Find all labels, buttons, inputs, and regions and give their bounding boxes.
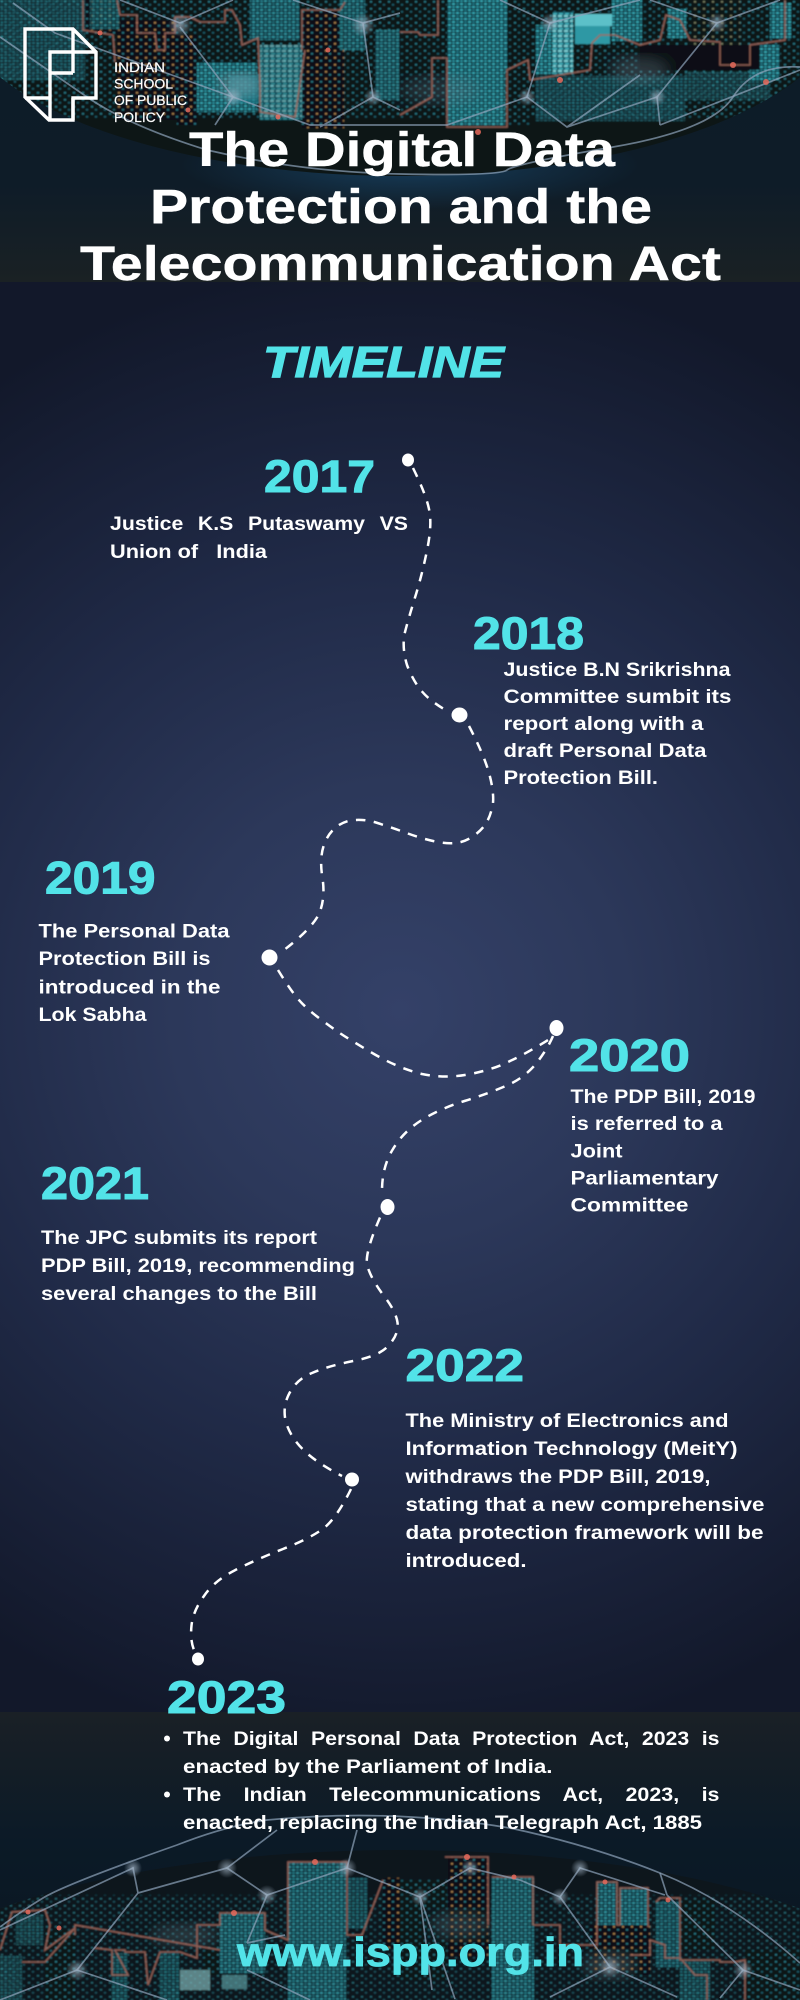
event: 2020: is referred to a: [570, 1113, 723, 1135]
logo wordmark: OF PUBLIC: [114, 92, 187, 108]
title: The Digital Data: [189, 124, 615, 177]
logo wordmark: SCHOOL: [114, 76, 173, 92]
event: 2019: [38, 852, 230, 1026]
event: 2021: several changes to the Bill: [41, 1283, 317, 1305]
event: 2023: [164, 1672, 720, 1834]
logo wordmark: POLICY: [114, 109, 166, 125]
event: 2022: withdraws the PDP Bill, 2019,: [404, 1466, 710, 1488]
network lines top: [0, 0, 800, 174]
red flares top: [98, 30, 769, 135]
event: 2019: introduced in the: [38, 976, 221, 998]
event: 2017: [110, 451, 408, 563]
event: 2023: 2023: [167, 1672, 286, 1723]
network lines bottom: [0, 1816, 800, 2000]
event: 2019: 2019: [45, 852, 156, 904]
title: Protection and the: [150, 181, 652, 234]
title: Telecommunication Act: [80, 238, 721, 291]
city buildings top: [0, 0, 800, 185]
event: 2021: [41, 1158, 355, 1305]
event: 2017: 2017: [264, 451, 375, 502]
bullet list: [164, 1728, 720, 1834]
event: 2022: introduced.: [406, 1550, 526, 1572]
event: 2022: stating that a new comprehensive: [406, 1494, 765, 1516]
red flares bottom: [26, 1854, 670, 1930]
city buildings bottom: [0, 1845, 800, 2000]
heading: timeline: TIMELINE: [263, 338, 506, 387]
logo wordmark: INDIAN: [114, 59, 165, 75]
bullet list: The Indian Telecommunications Act, 2023, is: [183, 1784, 720, 1806]
event: 2021: PDP Bill, 2019, recommending: [41, 1255, 355, 1277]
event: 2022: Information Technology (MeitY): [406, 1438, 738, 1460]
event: 2018: draft Personal Data: [504, 740, 707, 762]
event: 2021: The JPC submits its report: [41, 1227, 318, 1249]
event: 2020: Parliamentary: [570, 1168, 719, 1190]
bullet list: enacted, replacing the Indian Telegraph Act, 1885: [183, 1812, 702, 1834]
event: 2022: data protection framework will be: [406, 1522, 764, 1544]
panel: header city image: [0, 0, 800, 282]
event: 2019: Protection Bill is: [38, 948, 211, 970]
timeline dashed path: [191, 468, 553, 1650]
event: 2021: 2021: [41, 1158, 149, 1209]
event: 2018: [473, 608, 732, 789]
event: 2022: 2022: [406, 1340, 524, 1391]
bullet list: The Digital Personal Data Protection Act, 2023 is: [183, 1728, 720, 1750]
event: 2017: Union of India: [110, 541, 267, 563]
event: 2020: The PDP Bill, 2019: [570, 1086, 756, 1108]
panel: footer city image: [0, 1712, 800, 2000]
skyline outline top: [83, 0, 785, 127]
title: [80, 124, 721, 291]
timeline dots: [192, 454, 564, 1666]
event: 2019: Lok Sabha: [38, 1004, 147, 1026]
event: 2018: 2018: [473, 608, 584, 659]
logo wordmark: [114, 59, 187, 125]
event: 2022: [404, 1340, 765, 1572]
event: 2020: 2020: [569, 1030, 690, 1081]
event: 2018: report along with a: [504, 713, 704, 735]
icon: logo mark: [25, 29, 96, 120]
event: 2020: Joint: [570, 1140, 623, 1162]
skyline outline bottom: [0, 1857, 745, 2000]
logo: Indian School of Public Policy: [25, 29, 187, 125]
bullet list: enacted by the Parliament of India.: [183, 1756, 552, 1778]
website url: www.ispp.org.in: [236, 1929, 584, 1975]
event: 2020: Committee: [570, 1194, 689, 1216]
event: 2019: The Personal Data: [38, 920, 230, 942]
event: 2018: Committee sumbit its: [504, 686, 732, 708]
event: 2018: Justice B.N Srikrishna: [504, 659, 731, 681]
event: 2022: The Ministry of Electronics and: [406, 1410, 728, 1432]
event: 2018: Protection Bill.: [504, 767, 658, 789]
event: 2020: [569, 1030, 756, 1216]
event: 2017: Justice K.S Putaswamy VS: [110, 513, 408, 535]
